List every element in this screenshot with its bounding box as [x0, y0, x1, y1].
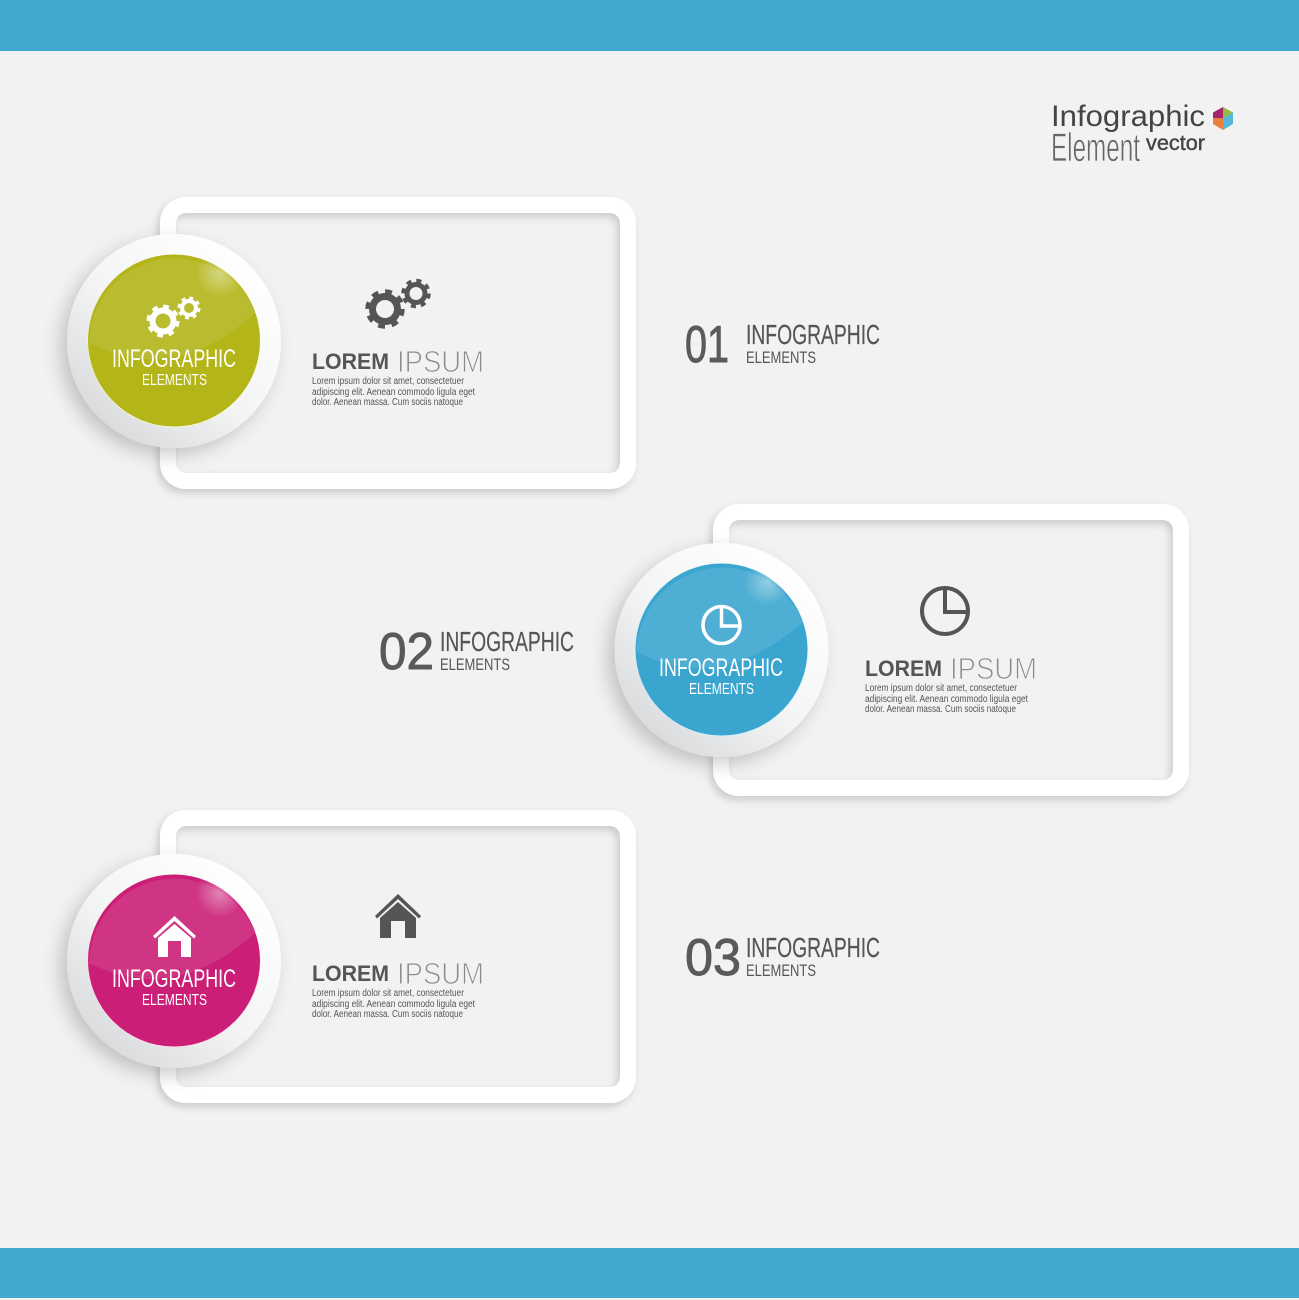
label 01 — [685, 316, 880, 374]
badge heading 2: INFOGRAPHIC — [659, 654, 783, 682]
icon: white gears — [148, 298, 199, 336]
bottom blue bar — [0, 1248, 1299, 1298]
card body text 3: adipiscing elit. Aenean commodo ligula eget — [312, 999, 475, 1010]
frame 3 — [168, 818, 628, 1095]
card heading 1: IPSUM — [397, 344, 484, 379]
icon: grey gears — [368, 280, 429, 326]
top blue bar — [0, 0, 1299, 51]
card heading 2 — [865, 651, 1037, 686]
icon: grey house — [375, 894, 421, 938]
card body text 2 — [865, 683, 1028, 715]
panel 1: green card — [67, 205, 628, 481]
card body text 1: Lorem ipsum dolor sit amet, consectetuer — [312, 376, 465, 387]
label 01: 01 — [685, 316, 729, 374]
badge heading 3: INFOGRAPHIC — [112, 965, 236, 993]
logo: Infographic Element vector: vector — [1146, 132, 1205, 155]
circle badge 2 — [614, 543, 828, 757]
card body text 3: Lorem ipsum dolor sit amet, consectetuer — [312, 988, 465, 999]
label 01: INFOGRAPHIC — [746, 319, 880, 350]
card heading 3: IPSUM — [397, 956, 484, 991]
card body text 1 — [312, 376, 475, 408]
card body text 1: adipiscing elit. Aenean commodo ligula eget — [312, 387, 475, 398]
card heading 1: LOREM — [312, 349, 389, 374]
card body text 2: adipiscing elit. Aenean commodo ligula eget — [865, 694, 1028, 705]
badge subheading 2: ELEMENTS — [689, 681, 754, 698]
label 02: ELEMENTS — [440, 655, 510, 674]
label 02: 02 — [379, 623, 434, 681]
panel 2: blue card — [614, 512, 1181, 788]
card heading 3: LOREM — [312, 961, 389, 986]
card body text 3: dolor. Aenean massa. Cum sociis natoque — [312, 1009, 463, 1020]
card body text 3 — [312, 988, 475, 1020]
icon: white pie chart — [703, 606, 740, 644]
label 03: 03 — [685, 929, 741, 987]
frame 1 — [168, 205, 628, 481]
icon: white house — [153, 916, 196, 957]
card heading 3 — [312, 956, 484, 991]
frame 2 — [721, 512, 1181, 788]
card body text 2: dolor. Aenean massa. Cum sociis natoque — [865, 704, 1016, 715]
badge heading 1: INFOGRAPHIC — [112, 345, 236, 373]
circle badge 3 — [67, 854, 281, 1068]
circle badge 1 — [67, 234, 281, 448]
label 02 — [379, 623, 574, 681]
icon: colour hexagon — [1213, 107, 1233, 130]
logo: Infographic Element vector — [1051, 100, 1233, 170]
card heading 2: LOREM — [865, 656, 942, 681]
panel 3: pink card — [67, 818, 628, 1095]
label 01: ELEMENTS — [746, 348, 816, 367]
icon: grey pie chart — [922, 588, 968, 634]
label 02: INFOGRAPHIC — [440, 626, 574, 657]
logo: Infographic Element vector: Infographic — [1051, 100, 1205, 133]
badge subheading 1: ELEMENTS — [142, 372, 207, 389]
card heading 2: IPSUM — [950, 651, 1037, 686]
card body text 2: Lorem ipsum dolor sit amet, consectetuer — [865, 683, 1018, 694]
badge subheading 3: ELEMENTS — [142, 992, 207, 1009]
label 03 — [685, 929, 880, 987]
label 03: INFOGRAPHIC — [746, 932, 880, 963]
logo: Infographic Element vector: Element — [1051, 126, 1140, 170]
label 03: ELEMENTS — [746, 961, 816, 980]
card body text 1: dolor. Aenean massa. Cum sociis natoque — [312, 397, 463, 408]
card heading 1 — [312, 344, 484, 379]
